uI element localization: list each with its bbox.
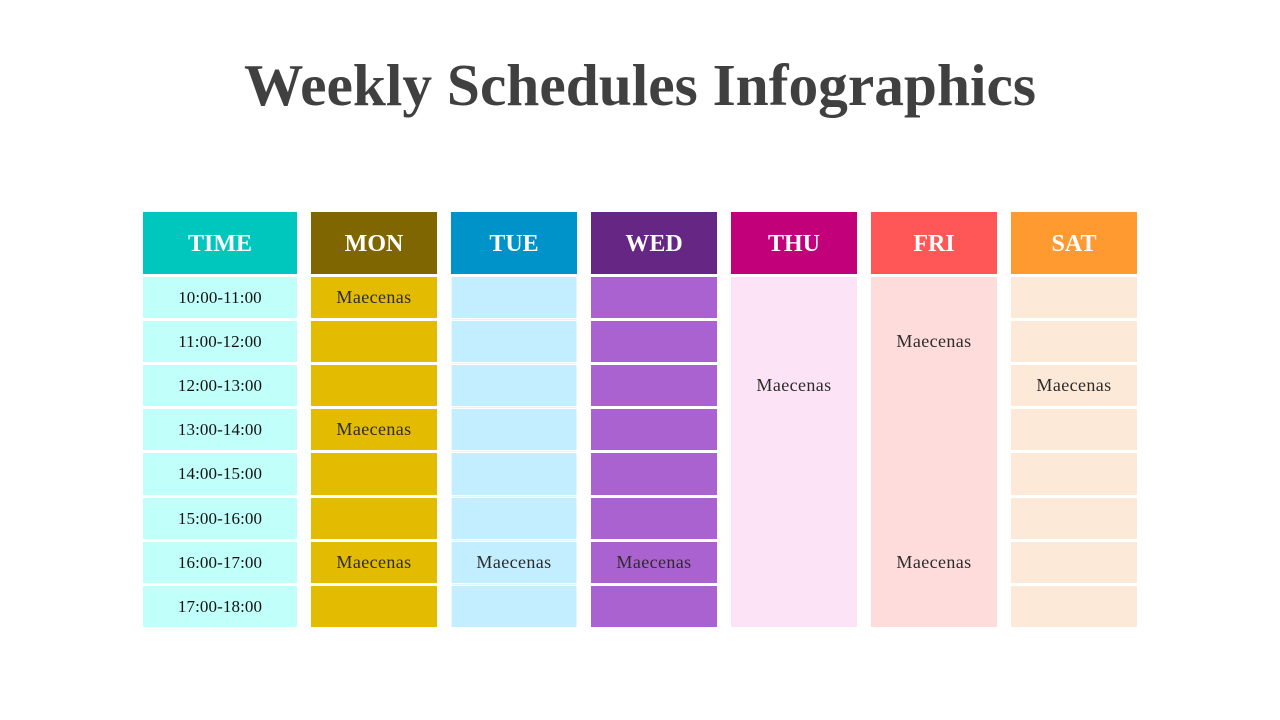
header: saturday bbox=[1011, 212, 1137, 274]
monday cell 7 bbox=[311, 542, 437, 583]
thursday merged block bbox=[731, 277, 857, 627]
monday cell 4: Maecenas bbox=[336, 419, 412, 439]
monday cell 3 bbox=[311, 365, 437, 406]
friday merged block bbox=[871, 277, 997, 627]
time slot 10:00-11:00 bbox=[143, 277, 297, 318]
time slot 13:00-14:00: 13:00-14:00 bbox=[178, 420, 262, 439]
tuesday cell 5 bbox=[452, 453, 576, 495]
time slot 17:00-18:00: 17:00-18:00 bbox=[178, 597, 262, 616]
monday cell 6 bbox=[311, 498, 437, 539]
header: time: TIME bbox=[188, 231, 252, 257]
time slot 11:00-12:00: 11:00-12:00 bbox=[178, 332, 262, 351]
column: time bbox=[143, 212, 297, 627]
time slot 12:00-13:00 bbox=[143, 365, 297, 406]
monday cell 1: Maecenas bbox=[336, 287, 412, 307]
saturday cell 3 bbox=[1011, 365, 1137, 406]
tuesday cell 1 bbox=[452, 277, 576, 318]
time slot 17:00-18:00 bbox=[143, 586, 297, 627]
tuesday cell 8 bbox=[452, 586, 576, 627]
wednesday cell 7 bbox=[591, 542, 717, 583]
wednesday cell 4 bbox=[591, 409, 717, 450]
wednesday cell 1 bbox=[591, 277, 717, 318]
wednesday cell 6 bbox=[591, 498, 717, 539]
tuesday cell 7 bbox=[452, 542, 576, 583]
friday label 1: Maecenas bbox=[896, 331, 972, 351]
time slot 15:00-16:00 bbox=[143, 498, 297, 539]
saturday cell 7 bbox=[1011, 542, 1137, 583]
header: thursday bbox=[731, 212, 857, 274]
saturday cell 5 bbox=[1011, 453, 1137, 495]
tuesday cell 7: Maecenas bbox=[476, 552, 552, 572]
column: thursday bbox=[731, 212, 857, 627]
time slot 14:00-15:00: 14:00-15:00 bbox=[178, 464, 262, 483]
friday label 2: Maecenas bbox=[896, 552, 972, 572]
monday cell 8 bbox=[311, 586, 437, 627]
header: saturday: SAT bbox=[1052, 231, 1096, 257]
time slot 14:00-15:00 bbox=[143, 453, 297, 495]
column: monday bbox=[311, 212, 437, 627]
wednesday cell 7: Maecenas bbox=[616, 552, 692, 572]
wednesday cell 2 bbox=[591, 321, 717, 362]
column: saturday bbox=[1011, 212, 1137, 627]
column: friday bbox=[871, 212, 997, 627]
header: tuesday: TUE bbox=[489, 231, 539, 257]
saturday cell 6 bbox=[1011, 498, 1137, 539]
saturday cell 4 bbox=[1011, 409, 1137, 450]
title: Weekly Schedules Infographics bbox=[244, 52, 1036, 118]
saturday cell 2 bbox=[1011, 321, 1137, 362]
monday cell 7: Maecenas bbox=[336, 552, 412, 572]
wednesday cell 8 bbox=[591, 586, 717, 627]
wednesday cell 5 bbox=[591, 453, 717, 495]
header: tuesday bbox=[451, 212, 577, 274]
header: monday bbox=[311, 212, 437, 274]
header: monday: MON bbox=[345, 231, 403, 257]
time slot 10:00-11:00: 10:00-11:00 bbox=[178, 288, 262, 307]
header: time bbox=[143, 212, 297, 274]
tuesday cell 6 bbox=[452, 498, 576, 539]
saturday cell 8 bbox=[1011, 586, 1137, 627]
time slot 16:00-17:00 bbox=[143, 542, 297, 583]
thursday label: Maecenas bbox=[756, 375, 832, 395]
column: tuesday bbox=[451, 212, 577, 627]
tuesday cell 4 bbox=[452, 409, 576, 450]
time slot 16:00-17:00: 16:00-17:00 bbox=[178, 553, 262, 572]
wednesday cell 3 bbox=[591, 365, 717, 406]
header: friday: FRI bbox=[913, 231, 955, 257]
time slot 11:00-12:00 bbox=[143, 321, 297, 362]
header: wednesday: WED bbox=[625, 231, 683, 257]
time slot 15:00-16:00: 15:00-16:00 bbox=[178, 509, 262, 528]
monday cell 5 bbox=[311, 453, 437, 495]
time slot 12:00-13:00: 12:00-13:00 bbox=[178, 376, 262, 395]
tuesday cell 3 bbox=[452, 365, 576, 406]
monday cell 1 bbox=[311, 277, 437, 318]
column: wednesday bbox=[591, 212, 717, 627]
header: friday bbox=[871, 212, 997, 274]
saturday cell 3: Maecenas bbox=[1036, 375, 1112, 395]
header: wednesday bbox=[591, 212, 717, 274]
time slot 13:00-14:00 bbox=[143, 409, 297, 450]
header: thursday: THU bbox=[768, 231, 820, 257]
monday cell 2 bbox=[311, 321, 437, 362]
saturday cell 1 bbox=[1011, 277, 1137, 318]
tuesday cell 2 bbox=[452, 321, 576, 362]
monday cell 4 bbox=[311, 409, 437, 450]
